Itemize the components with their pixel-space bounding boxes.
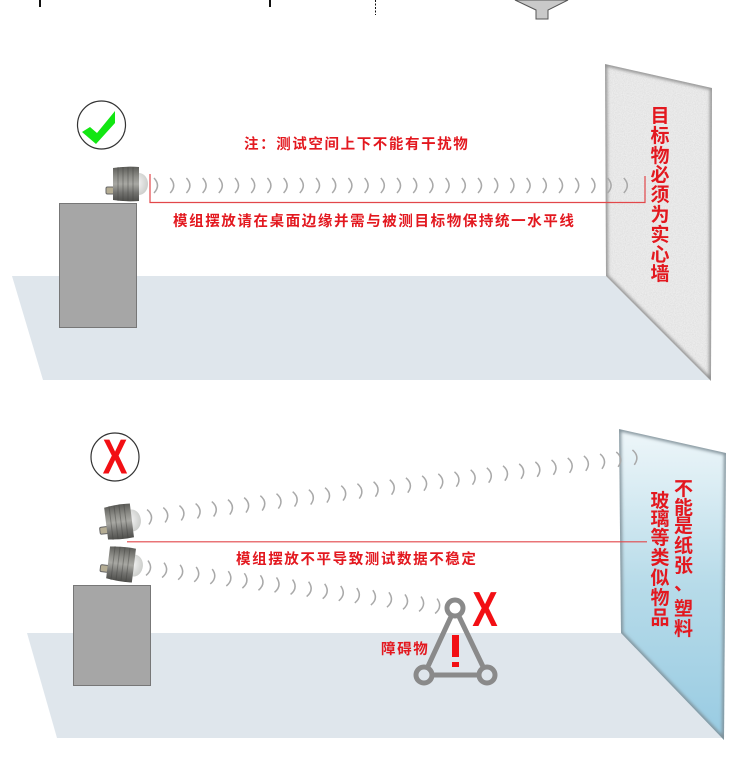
wall label: glass and similar items: 玻璃等类似物品: [650, 490, 670, 629]
icon: green check badge: [78, 101, 126, 149]
upward sound wave arcs: [147, 450, 638, 524]
downward sound wave arcs: [146, 561, 441, 614]
wall label: no paper or plastic: 不能是纸张、塑料: [674, 479, 693, 640]
note: unstable data: 模组摆放不平导致测试数据不稳定: [236, 550, 478, 568]
icon: obstacle warning triangle: [416, 600, 495, 683]
note: no interference: 注：测试空间上下不能有干扰物: [244, 135, 469, 153]
page fragments from the previous section: [39, 0, 568, 19]
desk: [74, 586, 150, 686]
floor: [12, 276, 710, 380]
panel: correct placement: [12, 60, 716, 385]
floor: [27, 633, 724, 738]
glass target wall: [619, 429, 726, 740]
sound wave arcs: [154, 178, 627, 193]
panel: incorrect placement: [27, 429, 726, 740]
reference line: [127, 541, 647, 543]
wall label: 目标物必须为实心墙: [650, 106, 670, 285]
note: placement on desk edge: 模组摆放请在桌面边缘并需与被测目标物保持统一水平线: [173, 212, 576, 230]
desk: [60, 204, 136, 328]
icon: red X badge: [91, 431, 139, 485]
sensor tilted down: [99, 544, 145, 584]
icon: red X badge: X: [103, 431, 127, 485]
sensor module: [106, 167, 148, 201]
sensor tilted up: [97, 502, 143, 542]
level bracket line: [150, 174, 645, 202]
red X on obstacle: X: [472, 583, 498, 637]
solid target wall: [605, 64, 712, 381]
obstacle label: 障碍物: [381, 640, 429, 658]
